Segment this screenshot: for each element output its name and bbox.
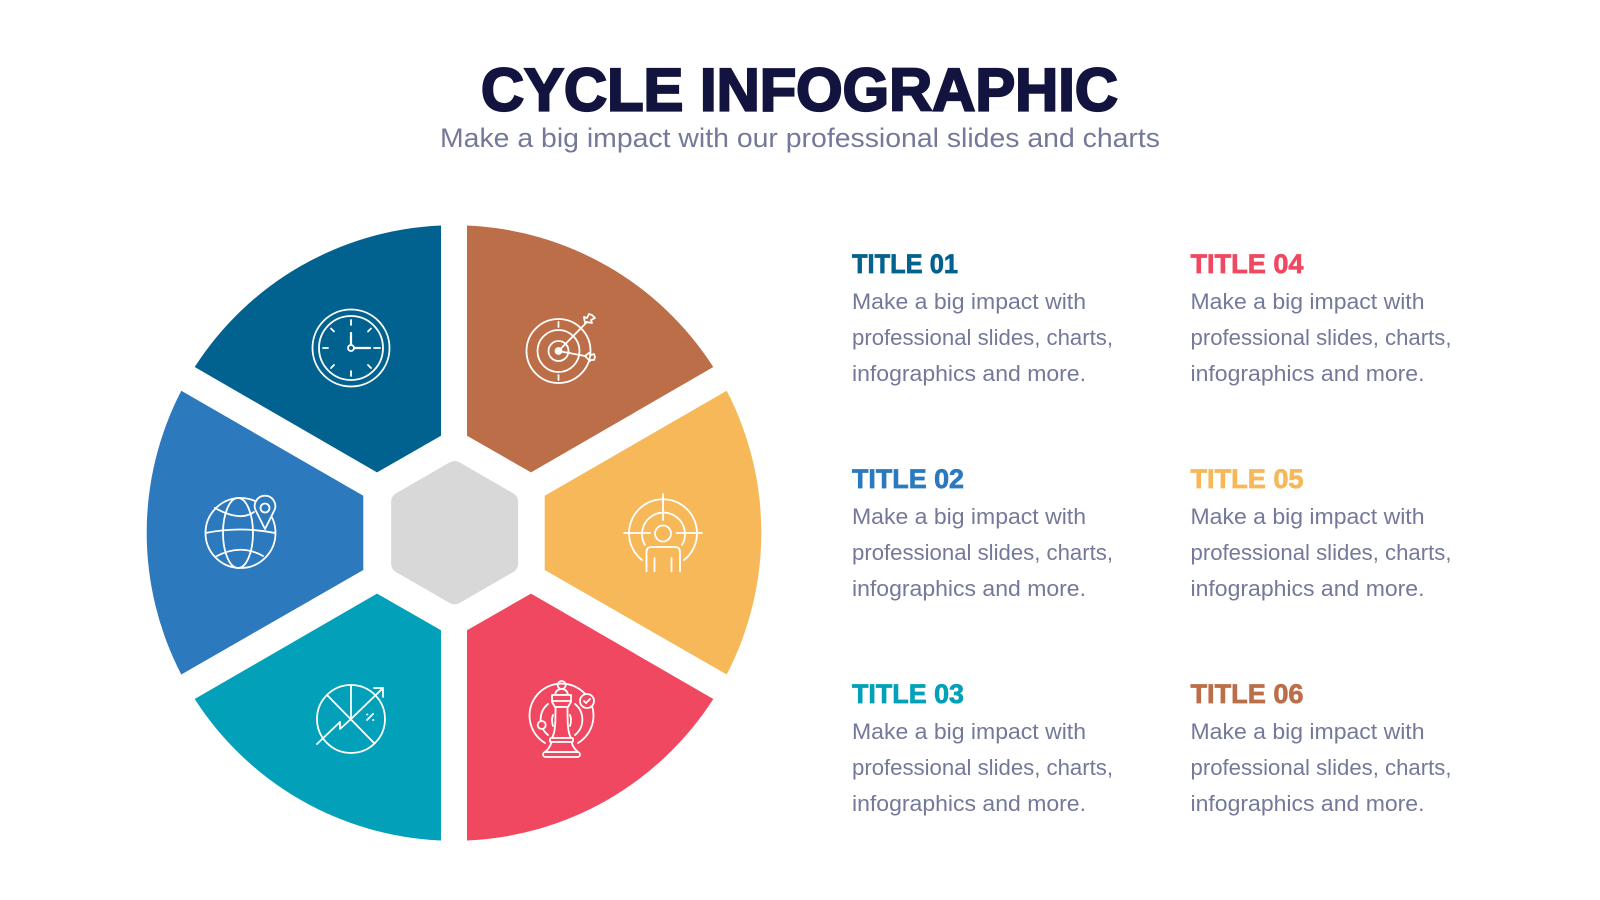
- title: CYCLE INFOGRAPHIC: [481, 56, 1118, 124]
- text block: title 05: Make a big impact with: [1190, 504, 1424, 529]
- text block: title 06: infographics and more.: [1190, 791, 1424, 816]
- text block: title 06: Make a big impact with: [1190, 719, 1424, 744]
- text block: title 05: infographics and more.: [1190, 576, 1424, 601]
- text block: title 03: [852, 679, 1113, 816]
- icon: target with arrows: [526, 314, 595, 383]
- segment 2: blue: [147, 391, 363, 674]
- text block: title 02: professional slides, charts,: [852, 540, 1113, 565]
- text block: title 04: TITLE 04: [1190, 249, 1304, 279]
- icon: crosshair person: [624, 494, 702, 572]
- text block: title 01: [852, 249, 1113, 386]
- segment 1: dark blue: [195, 226, 441, 472]
- icon: globe with pin: [206, 496, 276, 568]
- text block: title 03: professional slides, charts,: [852, 755, 1113, 780]
- text block: title 02: infographics and more.: [852, 576, 1086, 601]
- cycle diagram: [147, 226, 761, 840]
- subtitle: Make a big impact with our professional slides and charts: [440, 123, 1160, 153]
- text block: title 01: infographics and more.: [852, 361, 1086, 386]
- text block: title 02: TITLE 02: [852, 464, 964, 494]
- text block: title 03: infographics and more.: [852, 791, 1086, 816]
- segment 4: red: [467, 594, 713, 840]
- icon: chess piece: [530, 681, 594, 757]
- text block: title 01: TITLE 01: [852, 249, 958, 279]
- text block: title 05: TITLE 05: [1190, 464, 1304, 494]
- text block: title 04: infographics and more.: [1190, 361, 1424, 386]
- text block: title 02: [852, 464, 1113, 601]
- icon: pie chart with growth arrow: [317, 685, 385, 753]
- text block: title 06: professional slides, charts,: [1190, 755, 1452, 780]
- text block: title 06: [1190, 679, 1452, 816]
- text block: title 05: professional slides, charts,: [1190, 540, 1452, 565]
- center hexagon: [401, 471, 508, 594]
- segment 3: teal: [195, 594, 441, 840]
- segment 5: yellow: [545, 391, 761, 674]
- icon: clock: [312, 310, 390, 386]
- text block: title 01: professional slides, charts,: [852, 325, 1113, 350]
- text block: title 04: professional slides, charts,: [1190, 325, 1452, 350]
- segment 6: brown: [467, 226, 713, 472]
- text block: title 03: TITLE 03: [852, 679, 964, 709]
- text block: title 03: Make a big impact with: [852, 719, 1086, 744]
- text block: title 05: [1190, 464, 1452, 601]
- text block: title 06: TITLE 06: [1190, 679, 1304, 709]
- text block: title 04: Make a big impact with: [1190, 289, 1424, 314]
- text block: title 04: [1190, 249, 1452, 386]
- text block: title 01: Make a big impact with: [852, 289, 1086, 314]
- text block: title 02: Make a big impact with: [852, 504, 1086, 529]
